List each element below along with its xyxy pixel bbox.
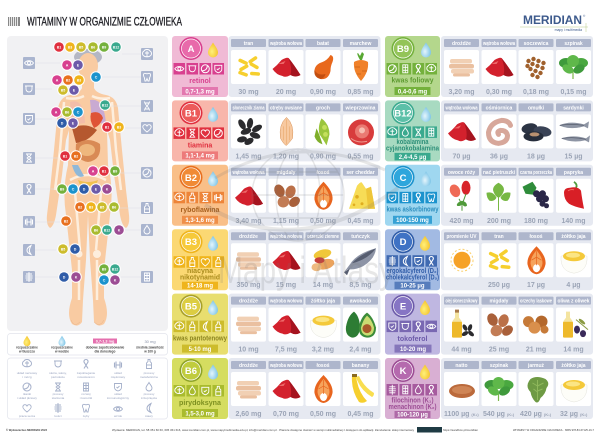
food panel: B2 sources: migdały [277,170,296,176]
vitamin bubbles: D [61,121,64,125]
food panel: B9 sources: drożdże [452,41,471,47]
legend: body systems: starzenia [52,396,65,400]
vitamin bubbles: B5 [61,247,65,251]
vitamin bubbles: B12 [112,267,118,271]
card: B6 pirydoksyna [172,358,228,419]
food panel: C sources: 420 mg [449,218,474,225]
card: B12 kobalamina [385,100,440,161]
card: A retinol [172,36,228,97]
food panel: B1 sources: 0,90 mg [310,153,336,160]
food panel: A sources [228,36,380,97]
card: B2 ryboflawina: 1,3-1,6 mg [185,218,215,224]
vitamin bubbles: B2 [64,219,68,223]
legend: body systems: układ nerwowy [17,371,38,375]
legend: symbols: rozpuszczalne [51,346,73,350]
panel: vitamin B6 [172,358,380,419]
panel: vitamin A [172,36,380,97]
vitamin bubbles: D [63,275,66,279]
food panel: D sources: łosoś [529,234,543,240]
card: B1 tiamina: tiamina [188,142,212,149]
legend: symbols: w 100 g [143,349,156,353]
card: A retinol: retinol [189,78,211,85]
food panel: B12 sources: 36 µg [490,153,508,160]
food panel: B6 sources: łosoś [316,363,330,369]
food panel: B3 sources: 350 mg [236,282,261,289]
food panel: E sources: 44 mg [451,347,472,354]
food panel: B3 sources: 14 mg [313,282,333,289]
legend: symbols [8,334,168,355]
vitamin bubbles: B5 [79,45,83,49]
card: B3 niacyna: nikotynamid [180,275,220,282]
food panel: C sources: 140 mg [561,218,586,225]
card: B6 pirydoksyna: 1,5-3,0 mg [185,411,215,417]
food panel: B12 sources: 70 µg [452,153,471,160]
food panel: A sources: 20 mg [276,89,296,96]
food panel: A sources: 0,85 mg [347,89,374,96]
food panel: E sources: olej słonecznikowy [446,299,478,305]
card: B9 kwas foliowy [385,36,440,97]
legend: body systems: nowotworom [77,375,95,379]
panel: vitamin B2 [172,165,380,226]
food panel: E sources: migdały [490,299,509,305]
vitamin bubbles: B1 [57,45,61,49]
card: B1 tiamina: 1,1-1,4 mg [185,154,215,160]
legend: body systems: mięśniowy [111,375,126,379]
food panel: K sources: 420 µg (K₁) [520,411,552,418]
legend: symbols: w tłuszczu [18,349,35,353]
card: B5 kwas pantotenowy [172,294,228,355]
food panel: B2 sources: ser cheddar [346,170,375,176]
card: B3 niacyna [172,229,228,290]
vitamin bubbles: D [74,247,77,251]
vitamin bubbles: B12 [104,228,110,232]
vitamin bubbles: A [55,110,58,114]
card: B3 niacyna: niacyna [187,268,213,275]
panel: vitamin C [385,165,593,226]
card: B9 kwas foliowy: 0,4-0,6 mg [398,89,428,95]
card: B5 kwas pantotenowy: kwas pantotenowy [173,336,227,343]
vitamin bubbles: B6 [112,205,116,209]
connector lines [35,54,141,277]
card: B1 tiamina [172,100,228,161]
legend: body systems: krzepnięcia [141,396,157,400]
food panel: B5 sources: 10 mg [238,347,259,354]
food panel: D sources: tran [494,234,504,240]
logo: Meridian: MERIDIAN [523,13,582,27]
card: B2 ryboflawina: ryboflawina [181,207,220,214]
legend: body systems: skóra, włosy, [49,371,67,375]
legend: body systems: i komórki [80,396,92,400]
food panel: B2 sources: 0,45 mg [347,218,374,225]
card: B12 kobalamina: 2,4-4,5 µg [399,155,427,161]
food panel: K sources: jarmuż [527,363,545,369]
card: B12 kobalamina: B12 [394,108,412,119]
food panel: K sources: 32 µg (K₂) [560,411,588,418]
food panel: B1 sources: słonecznik ziarna [232,105,265,111]
card: B2 ryboflawina: B2 [185,173,197,184]
food panel: B12 sources: 18 µg [527,153,545,160]
legend: symbols: średnia zawartość [136,346,164,350]
vitamin bubbles: B3 [68,45,72,49]
food panel: D sources: promienie UV [446,234,477,240]
card: C kwas askorbinowy: C [400,173,407,184]
badge: publisher link [417,427,442,432]
food panel: B3 sources: wątroba wołowa [269,234,302,240]
panel: vitamin B9 [385,36,593,97]
legend: body systems: wzrok [114,414,122,418]
food panel: B2 sources: wątroba wołowa [232,170,265,176]
food panel: B5 sources: wątroba wołowa [269,299,302,305]
watermark: globe and publisher name: Mapy i Atlasy [218,250,394,292]
food panel: E sources: oliwa z oliwek [558,299,590,305]
food panel: B6 sources: 0,50 mg [310,411,336,418]
panel: human body map [7,36,168,331]
vitamin bubbles: B2 [66,78,70,82]
vitamin bubbles: B3 [89,205,93,209]
legend: symbols: 30 mg [144,339,156,344]
food panel: A sources: wątroba wołowa [269,41,302,47]
food panel: B9 sources [441,36,593,97]
card: D ergokalcyferol: cholekalcyferol (D₃) [386,275,439,282]
food panel: B3 sources: orzeszki ziemne [307,234,339,240]
vitamin bubbles: B2 [74,154,78,158]
food panel: B6 sources: wątroba wołowa [269,363,302,369]
vitamin bubbles: A [92,169,95,173]
card: K filochinon: K [400,366,407,377]
food panel: D sources: 4 µg [566,282,581,289]
card: B3 niacyna: 14-18 mg [187,284,213,290]
food panel: B2 sources [228,165,380,226]
card: E tokoferol: E [400,302,406,313]
legend: body systems: tkanki [23,392,31,396]
food panel: A sources: batat [317,41,329,47]
legend: body systems: procesy [53,392,64,396]
food panel: B5 sources: 2,4 mg [349,347,372,354]
card: D ergokalcyferol: ergokalcyferol (D₂) [386,268,438,275]
food panel: E sources: 21 mg [526,347,546,354]
food panel: C sources: papryka [564,170,583,176]
card: B9 kwas foliowy: kwas foliowy [392,78,434,84]
food panel: B3 sources: drożdże [239,234,258,240]
food panel: C sources: 180 mg [524,218,548,225]
food panel: B5 sources: żółtko jaja [311,299,335,305]
food panel: E sources: 14 mg [563,347,584,354]
card: E tokoferol [385,294,440,355]
food panel: B9 sources: szpinak [564,41,583,47]
card: K filochinon: menachinon (K₂) [388,404,436,411]
panel: vitamin K [385,358,593,419]
card: B6 pirydoksyna: pirydoksyna [179,400,221,407]
vitamin bubbles: K [118,228,121,232]
food panel: E sources [441,294,593,355]
food panel: B9 sources: wątroba wołowa [482,41,515,47]
food panel: A sources: marchew [350,41,371,47]
food panel: B9 sources: 3,20 mg [448,89,475,96]
legend: body systems: procesy [144,371,155,375]
food panel: D sources [441,229,593,290]
food panel: A sources: 30 mg [238,89,259,96]
food panel: B2 sources: 3,40 mg [235,218,262,225]
vitamin bubbles: B5 [100,205,104,209]
vitamin bubbles: B1 [102,169,106,173]
legend: body systems: paznokcie [51,375,65,379]
food panel: B6 sources: 0,70 mg [273,411,299,418]
food panel: K sources: natto [455,363,468,369]
legend: body systems: układ [114,371,122,375]
vitamin bubbles: C [72,187,75,191]
legend: symbols: dobowe zapotrzebowanie [86,346,125,350]
footer [6,427,595,432]
food panel: B2 sources: 1,15 mg [273,218,299,225]
legend: body systems: metaboliczne [140,375,158,379]
food panel: K sources: żółtko jaja [561,363,586,369]
card: E tokoferol: tokoferol [398,336,428,343]
food panel: A sources: tran [244,41,253,47]
footer: https://sandbox.pl/meridian [443,428,479,432]
legend: body systems: i mózg [22,375,32,379]
vitamin bubbles: A [66,63,69,67]
card: B12 kobalamina: cyjanokobalamina [386,145,439,152]
food panel: D sources: 250 µg [488,282,510,289]
vitamin bubbles: C [103,278,106,282]
vitamin bubbles: B3 [77,78,81,82]
legend: body systems: rozwój [82,392,91,396]
food panel: B9 sources: 0,15 mg [560,89,587,96]
legend: body systems: procesy [144,392,155,396]
food panel: B6 sources: banany [352,363,369,369]
food panel: C sources: owoce róży [448,170,475,176]
card: E tokoferol: 10-20 mg [400,347,426,353]
body-system icons [23,48,153,283]
card: D ergokalcyferol [385,229,440,290]
food panel: D sources: żółtko jaja [561,234,586,240]
vitamin bubbles: B9 [60,187,64,191]
illustration: human body [47,49,129,326]
vitamin bubbles: B12 [102,103,108,107]
vitamin bubbles: B5 [61,88,65,92]
food panel: B5 sources: 7,5 mg [275,347,297,354]
food panel: B6 sources: drożdże [239,363,258,369]
card: B9 kwas foliowy: B9 [397,44,409,55]
vitamin bubbles [50,41,125,286]
vitamin bubbles: B1 [63,154,67,158]
food panel: B3 sources [228,229,380,290]
food panel: B1 sources: 1,20 mg [273,153,299,160]
food panel: B12 sources: 15 µg [564,153,583,160]
card: C kwas askorbinowy: kwas askorbinowy [386,206,439,213]
vitamin bubbles: B6 [65,110,69,114]
legend: body systems: kości [54,414,62,418]
vitamin bubbles: B3 [117,125,121,129]
food panel: C sources: czarna porzeczka [520,170,552,176]
food panel: B6 sources: 0,45 mg [347,411,374,418]
card: B12 kobalamina: kobalamina [396,139,429,146]
food panel: B5 sources: drożdże [239,299,258,305]
vitamin bubbles: E [72,121,75,125]
title [8,16,182,28]
legend: body systems: stawy [145,414,153,418]
card: C kwas askorbinowy [385,165,440,226]
card: K filochinon: 100-120 µg [397,413,428,419]
food panel: E sources: 25 mg [489,347,509,354]
legend: body systems: zapobieganie [77,371,95,375]
food panel: B5 sources [228,294,380,355]
legend: symbols: w wodzie [54,349,69,353]
card: B2 ryboflawina [172,165,228,226]
card: A retinol: A [188,44,195,55]
vitamin bubbles: B6 [94,228,98,232]
food panel: B1 sources: 0,55 mg [347,153,374,160]
watermark: globe and publisher name [205,149,398,292]
panel: vitamin B12 [385,100,593,161]
food panel: B1 sources: groch [316,105,330,111]
food panel: K sources [441,358,593,419]
food panel: B12 sources: sardynki [563,105,584,111]
food panel: K sources: 1100 µg (K₂) [444,411,479,418]
vitamin bubbles: E [95,187,98,191]
card: K filochinon [385,358,440,419]
food panel: B2 sources: łosoś [316,170,330,176]
panel: vitamin B5 [172,294,380,355]
panel: vitamin B1 [172,100,380,161]
card: B5 kwas pantotenowy: B5 [185,302,198,313]
food panel: B5 sources: 3,2 mg [312,347,334,354]
footer: WITAMINY W ORGANIZMIE CZŁOWIEKA · ISBN 978-83-67125-16-7 [513,428,595,432]
title: WITAMINY W ORGANIZMIE CZŁOWIEKA [27,16,182,28]
food panel: B1 sources: otręby owsiane [270,105,302,111]
vitamin bubbles: K [75,275,78,279]
legend: symbols: 0,7-1,3 mg [96,340,115,344]
food panel: B12 sources [441,100,593,161]
legend: body systems: i układ płciowy [17,396,37,400]
food panel: B3 sources: tuńczyk [351,234,370,240]
vitamin bubbles: E [77,63,80,67]
vitamin bubbles: B12 [113,45,119,49]
legend: body systems: zęby [83,414,90,418]
vitamin bubbles: B9 [113,169,117,173]
card: D ergokalcyferol: 10-25 µg [400,284,425,290]
food panel: K sources: szpinak [490,363,508,369]
footer: Wydawca: MERIDIAN, tel. 58 351 60 60, 605 361 616, www.meridian.com.pl, www.mapyimultimedia.edu.pl, info@meridian.com.pl · Plansze dostępne również w wersji multimedialnej z dostępem do aplikacji. Zamówienia: sklep internetowy [112,428,415,432]
legend: symbols: dla dorosłego [95,349,115,353]
card: B6 pirydoksyna: B6 [185,366,197,377]
vitamin bubbles: B9 [102,267,106,271]
panel: vitamin B3 [172,229,380,290]
food panel: B12 sources: ośmiornica [486,105,513,111]
panel: vitamin E [385,294,593,355]
food panel: E sources: orzechy laskowe [520,299,552,305]
vitamin bubbles: K [106,187,109,191]
card: B3 niacyna: B3 [185,237,197,248]
vitamin bubbles: C [95,75,98,79]
food panel: A sources: 0,90 mg [310,89,336,96]
food panel: B9 sources: 0,18 mg [523,89,549,96]
food panel: C sources: nać pietruszki [483,170,516,176]
vitamin bubbles: E [73,88,76,92]
logo: Meridian: mapy i multimedia [555,28,582,32]
legend: symbols: rozpuszczalne [16,346,38,350]
vitamin bubbles: B9 [102,45,106,49]
icon: barcode [8,17,20,26]
food panel: D sources: 17 µg [527,282,545,289]
vitamin bubbles: B6 [91,45,95,49]
card: B1 tiamina: B1 [185,108,198,119]
legend: body systems: układ [114,392,122,396]
card: D ergokalcyferol: D [400,237,407,248]
food panel: C sources: 200 mg [487,218,511,225]
food panel: K sources: 540 µg (K₁) [483,411,515,418]
food panel: C sources [441,165,593,226]
card: A retinol: 0,7-1,3 mg [185,89,215,95]
vitamin bubbles: C [77,110,80,114]
food panel: B3 sources: 15 mg [276,282,296,289]
food panel: B5 sources: awokado [350,299,371,305]
footer: © Wydawnictwo MERIDIAN 2023 [6,428,48,432]
vitamin bubbles: B2 [78,205,82,209]
card: B5 kwas pantotenowy: 5-10 mg [189,347,212,353]
logo: Meridian [520,13,588,32]
food panel: B3 sources: 8,5 mg [349,282,372,289]
card: C kwas askorbinowy: 100-150 mg [396,218,429,224]
food panel: B6 sources [228,358,380,419]
vitamin bubbles: D [83,187,86,191]
card: K filochinon: filochinon (K₁) [392,398,434,404]
food panel: B12 sources: wątroba wołowa [445,105,478,111]
food panel: B9 sources: soczewica [524,41,549,47]
vitamin bubbles: K [114,278,117,282]
food panel: B1 sources [228,100,380,161]
food panel: B9 sources: 0,30 mg [486,89,512,96]
panel: vitamin D [385,229,593,290]
food panel: B1 sources: 1,45 mg [235,153,262,160]
food panel: B12 sources: omułki [528,105,545,111]
logo: Meridian: ® [583,14,586,18]
food panel: B6 sources: 2,60 mg [235,411,262,418]
vitamin bubbles: B1 [105,125,109,129]
food panel: B1 sources: wieprzowina [344,105,376,111]
legend: body systems: praca serca [19,414,35,418]
legend: body systems [8,358,168,419]
food panel: B2 sources: 0,50 mg [310,218,336,225]
legend: body systems: immunologiczny [107,396,130,400]
vitamin bubbles: A [56,78,59,82]
